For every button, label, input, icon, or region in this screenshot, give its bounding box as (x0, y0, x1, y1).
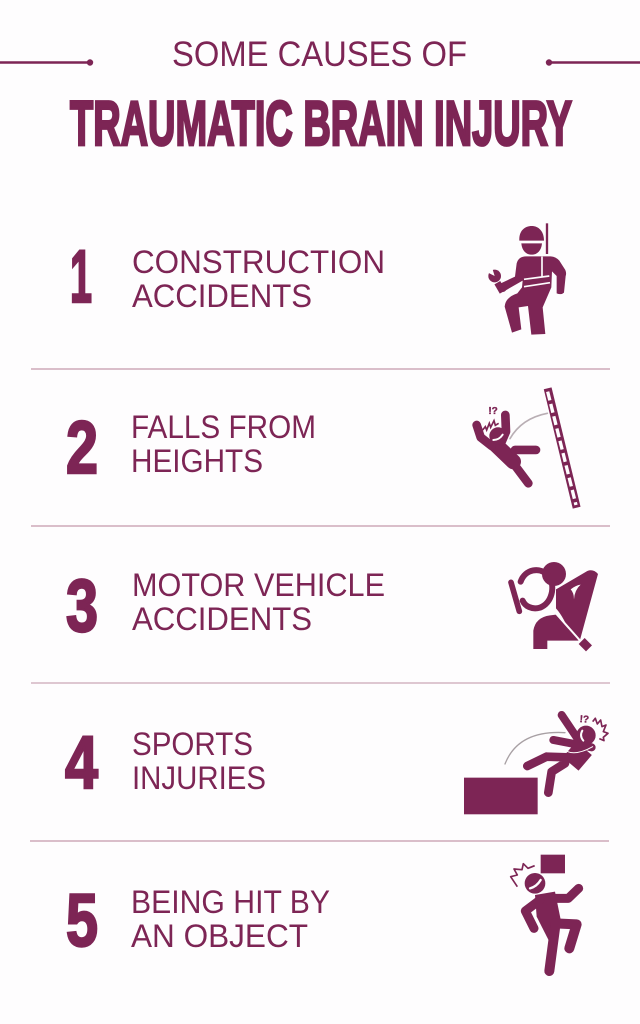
icon: person hit by falling object (511, 855, 579, 971)
divider (30, 840, 609, 842)
label: construction accidents (132, 244, 385, 314)
label: falls from heights: FALLS FROM (131, 409, 316, 445)
label: construction accidents: ACCIDENTS (132, 278, 312, 314)
item 1: construction accidents (70, 223, 566, 335)
subtitle: SOME CAUSES OF (172, 35, 467, 74)
number 1: 1 (70, 235, 92, 318)
label: sports injuries: INJURIES (132, 760, 266, 796)
header decoration: right line (546, 59, 640, 66)
header decoration: left line (0, 59, 93, 66)
label: motor vehicle accidents: MOTOR VEHICLE (132, 567, 385, 603)
number 2: 2 (66, 406, 98, 489)
divider (31, 682, 610, 684)
label: construction accidents: CONSTRUCTION (132, 244, 385, 280)
item 4: sports injuries (65, 714, 608, 814)
label: falls from heights (131, 409, 316, 479)
label: motor vehicle accidents (132, 567, 385, 637)
number 3: 3 (66, 564, 98, 647)
divider (31, 368, 610, 370)
icon: construction worker (488, 223, 566, 335)
label: sports injuries: SPORTS (132, 726, 253, 762)
number 5: 5 (66, 879, 98, 962)
label: motor vehicle accidents: ACCIDENTS (132, 601, 312, 637)
icon: person falling off a block (464, 714, 608, 814)
label: falls from heights: HEIGHTS (131, 443, 263, 479)
item 3: motor vehicle accidents (66, 562, 598, 651)
icon: driver with seat belt (511, 562, 598, 651)
label: sports injuries (132, 726, 266, 796)
item 5: being hit by an object (66, 855, 579, 971)
number 4: 4 (65, 721, 98, 804)
item 2: falls from heights (66, 388, 577, 508)
icon: person falling from ladder: !? (488, 406, 498, 417)
label: being hit by an object (131, 884, 330, 954)
icon: person falling off a block: !? (579, 714, 589, 726)
label: being hit by an object: AN OBJECT (131, 918, 308, 954)
divider (31, 525, 610, 527)
icon: person falling from ladder (477, 388, 577, 508)
label: being hit by an object: BEING HIT BY (131, 884, 330, 920)
